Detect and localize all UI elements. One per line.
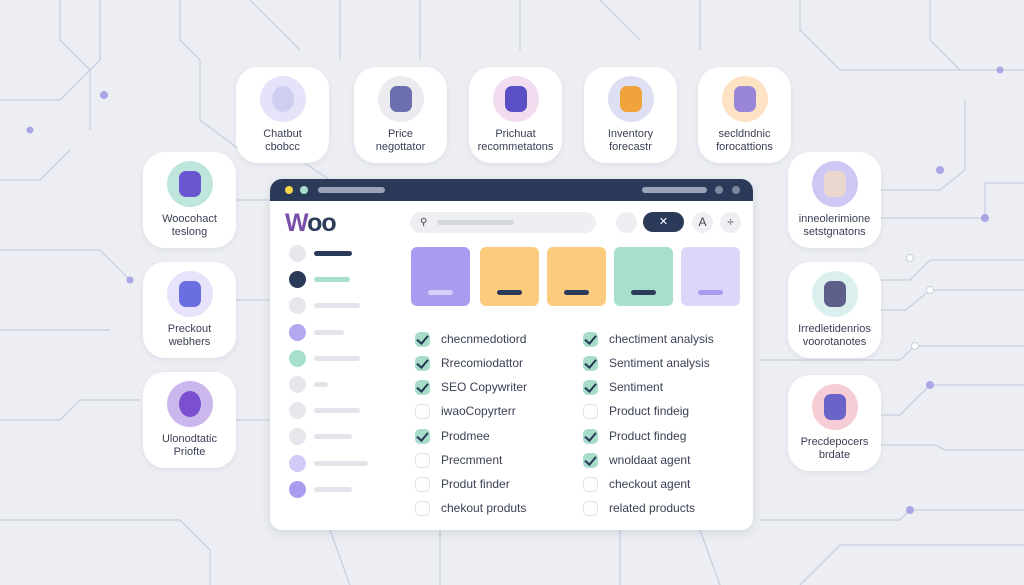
checklist: Prodmee — [441, 429, 490, 443]
card: testing: teslong — [172, 226, 207, 238]
card: right 3: brdate — [819, 449, 850, 461]
card: forecasting — [698, 67, 791, 163]
checklist: checkout agent — [609, 477, 690, 491]
card: profile: Priofte — [174, 446, 205, 458]
sidebar — [289, 245, 368, 498]
card: product recommendations: Prichuat — [495, 128, 536, 140]
checklist — [415, 332, 714, 516]
checklist: Rrecomiodattor — [441, 356, 523, 370]
toolbar buttons: A — [698, 215, 706, 229]
checklist: checnmedotiord — [441, 332, 526, 346]
card: checkout webhooks: Preckout — [168, 323, 211, 335]
card: right 2 — [788, 262, 881, 358]
card: inventory forecast — [584, 67, 677, 163]
checklist: Precmment — [441, 453, 502, 467]
checklist: Produt finder — [441, 477, 510, 491]
search bar: ⚲ — [420, 217, 427, 228]
window header — [270, 179, 753, 201]
card: inventory forecast: Inventory — [608, 128, 653, 140]
checklist: Product findeg — [609, 429, 686, 443]
card: forecasting: secldndnic — [718, 128, 770, 140]
card: product recommendations — [469, 67, 562, 163]
card: chatbot: cbobcc — [265, 141, 300, 153]
logo: Woo — [285, 209, 336, 237]
card: right 1: inneolerimione — [799, 213, 870, 225]
checklist: chekout produts — [441, 501, 526, 515]
checklist: wnoldaat agent — [609, 453, 690, 467]
card: price negotiator: negottator — [376, 141, 425, 153]
card: right 2: voorotanotes — [803, 336, 866, 348]
card: profile: Ulonodtatic — [162, 433, 217, 445]
card: right 3 — [788, 375, 881, 471]
card: forecasting: forocattions — [716, 141, 773, 153]
checklist: related products — [609, 501, 695, 515]
card: testing — [143, 152, 236, 248]
checklist: chectiment analysis — [609, 332, 714, 346]
toolbar buttons — [616, 212, 741, 233]
card: chatbot — [236, 67, 329, 163]
checklist: Sentiment analysis — [609, 356, 710, 370]
card: testing: Woocohact — [162, 213, 217, 225]
checklist: Sentiment — [609, 380, 663, 394]
card: checkout webhooks — [143, 262, 236, 358]
search bar — [410, 212, 596, 233]
card: right 1 — [788, 152, 881, 248]
browser window — [270, 179, 753, 530]
card: checkout webhooks: webhers — [169, 336, 210, 348]
card: right 2: Irredletidenrios — [798, 323, 871, 335]
card: price negotiator: Price — [388, 128, 413, 140]
card: right 1: setstgnatons — [803, 226, 866, 238]
checklist: SEO Copywriter — [441, 380, 527, 394]
card: inventory forecast: forecastr — [609, 141, 652, 153]
toolbar buttons: ✕ — [659, 216, 668, 228]
card: right 3: Precdepocers — [801, 436, 868, 448]
checklist: Product findeig — [609, 404, 689, 418]
card: profile — [143, 372, 236, 468]
toolbar buttons: ÷ — [727, 215, 734, 229]
card: product recommendations: recommetatons — [478, 141, 553, 153]
checklist: iwaoCopyrterr — [441, 404, 516, 418]
card: price negotiator — [354, 67, 447, 163]
feature tiles — [411, 247, 740, 306]
card: chatbot: Chatbut — [263, 128, 302, 140]
